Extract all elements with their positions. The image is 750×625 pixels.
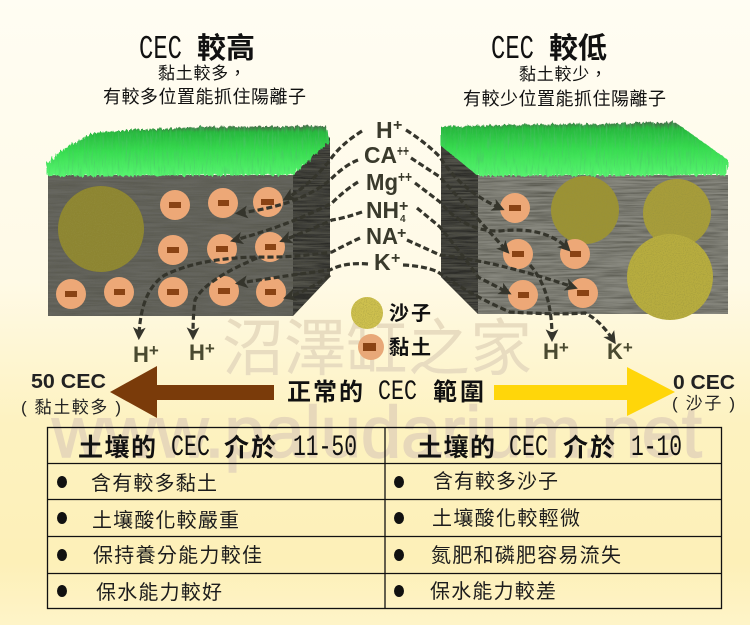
leached ion labels: + — [205, 339, 215, 358]
leached ion labels: H — [189, 340, 205, 365]
right column text: 保水能力較差 — [430, 580, 556, 603]
soil side face — [441, 145, 478, 314]
grass top — [47, 126, 329, 176]
left column text: 土壤酸化較嚴重 — [92, 509, 239, 532]
arrow: toward 50 CEC — [110, 366, 274, 418]
label: sand: 沙子 — [389, 303, 431, 325]
table header: 1-10: 土壤的 — [417, 433, 495, 462]
text: low CEC description — [463, 65, 666, 109]
label: 0 CEC — [672, 372, 735, 413]
comparison table — [47, 427, 722, 609]
table header: 1-10: 1-10 — [631, 431, 682, 465]
ion labels: + — [399, 198, 408, 215]
sand particles — [551, 176, 713, 320]
clay particles — [500, 193, 598, 310]
leached ion labels: + — [149, 341, 159, 360]
ion labels: ++ — [397, 143, 409, 160]
leached ion labels: + — [559, 338, 569, 357]
ion labels — [364, 117, 412, 275]
table header: 1-10: 介於 — [563, 434, 615, 462]
label: 0 CEC: 0 CEC — [673, 372, 735, 394]
leached ion labels: H — [543, 339, 559, 364]
watermark: site name: 沼澤缸之家 — [222, 315, 532, 384]
leached ion labels: + — [623, 338, 633, 357]
heading: CEC high — [139, 31, 255, 68]
left column text: 保水能力較好 — [96, 581, 222, 604]
clay particles — [56, 187, 286, 309]
heading: CEC low: 較低 — [549, 32, 607, 65]
watermark: site url: www.paludarium.net — [51, 393, 702, 473]
table header: 1-10 — [417, 431, 682, 465]
table header: 11-50 — [78, 431, 357, 465]
heading: CEC high: CEC — [139, 31, 182, 68]
ion labels: H — [376, 117, 393, 143]
heading: CEC low: CEC — [491, 31, 534, 68]
left column text — [91, 472, 262, 604]
icon: clay — [358, 334, 384, 360]
soil front face — [478, 175, 728, 314]
ion labels: ++ — [398, 169, 412, 186]
heading: normal CEC range: 正常的 — [287, 379, 363, 406]
heading: normal CEC range: CEC — [378, 377, 417, 408]
legend: sand and clay — [351, 297, 431, 360]
ion labels: NH — [366, 197, 399, 223]
ion labels: NA — [366, 223, 398, 249]
soil side face — [293, 137, 330, 316]
ion labels: Mg — [366, 169, 398, 195]
table header: 11-50: CEC — [171, 431, 210, 465]
right column text: 土壤酸化較輕微 — [432, 507, 580, 530]
left column text: 保持養分能力較佳 — [93, 544, 262, 567]
soil front face — [48, 175, 293, 316]
text: low CEC description: 黏土較少， — [519, 65, 607, 84]
leached ion labels: H — [133, 342, 149, 367]
ion labels: K — [374, 249, 391, 275]
right column text: 氮肥和磷肥容易流失 — [431, 544, 621, 567]
table header: 1-10: CEC — [509, 431, 548, 465]
label: 50 CEC: ( 黏土較多 ) — [21, 398, 121, 417]
table grid — [47, 427, 722, 609]
heading: normal CEC range: 範圍 — [433, 379, 484, 406]
ion labels: 4 — [400, 214, 406, 225]
label: 50 CEC: 50 CEC — [31, 371, 106, 393]
text: high CEC description: 黏土較多， — [158, 64, 246, 83]
soil block: low CEC — [441, 122, 728, 320]
icon: sand — [351, 297, 383, 329]
soil block: high CEC — [47, 126, 330, 316]
heading: CEC low — [491, 31, 607, 68]
ion labels: + — [393, 117, 402, 134]
dashed arrows: ions into low CEC soil — [403, 130, 613, 340]
text: high CEC description — [103, 64, 306, 107]
right column text: 含有較多沙子 — [433, 470, 558, 493]
ion labels: + — [391, 250, 400, 267]
arrow: toward 0 CEC — [494, 367, 675, 416]
heading: CEC high: 較高 — [197, 32, 255, 65]
leached ion labels: K — [607, 339, 623, 364]
bullets — [57, 476, 404, 597]
grass top — [441, 122, 728, 176]
table header: 11-50: 介於 — [224, 434, 276, 462]
right column text — [430, 470, 621, 603]
table header: 11-50: 土壤的 — [78, 433, 156, 462]
left column text: 含有較多黏土 — [91, 472, 217, 495]
label: clay: 黏土 — [389, 336, 431, 359]
text: low CEC description: 有較少位置能抓住陽離子 — [463, 89, 666, 109]
dashed arrows: ions into high CEC soil — [139, 131, 368, 335]
label: 0 CEC: ( 沙子 ) — [672, 394, 735, 413]
ion labels: + — [397, 225, 406, 242]
label: 50 CEC — [21, 371, 121, 417]
heading: normal CEC range — [287, 377, 484, 408]
text: high CEC description: 有較多位置能抓住陽離子 — [103, 87, 306, 107]
table header: 11-50: 11-50 — [293, 431, 357, 465]
leached ion labels — [133, 338, 633, 367]
ion labels: CA — [364, 142, 397, 168]
sand particle — [58, 186, 144, 272]
